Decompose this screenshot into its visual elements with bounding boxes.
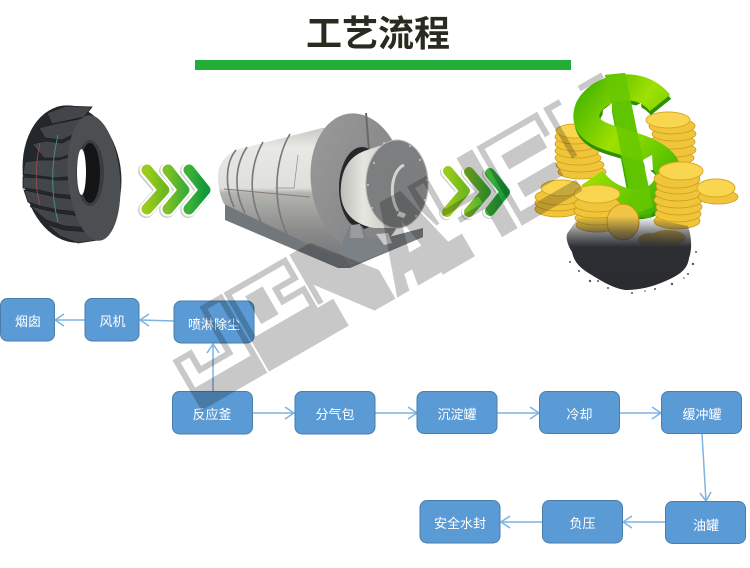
flow box: fan: 风机 (99, 314, 126, 329)
arrow: negative pressure to water seal (501, 516, 542, 528)
arrow: fan to chimney (55, 314, 85, 326)
arrow: separator to settling tank (375, 407, 417, 419)
flow box: oil tank (666, 502, 746, 544)
arrows: second chevrons (446, 171, 505, 213)
arrow: reactor to dust removal (207, 344, 219, 392)
watermark letter E (224, 247, 349, 372)
flow box: reactor: 反应釜 (192, 407, 232, 422)
arrow: reactor to separator (252, 407, 294, 419)
flow box: safety water seal (420, 500, 500, 543)
flow box: oil tank: 油罐 (693, 518, 719, 533)
flow box: reactor (172, 392, 252, 434)
title underline bar (195, 60, 571, 70)
front left coin stack (535, 180, 581, 217)
arrow: cooling to buffer tank (620, 407, 661, 419)
flow arrows (55, 314, 711, 528)
back right coin stack (646, 112, 696, 165)
watermark letter N right (542, 73, 631, 159)
leaning coins (607, 204, 686, 247)
arrows: first chevrons (146, 170, 205, 210)
arrow: settling tank to cooling (497, 407, 539, 419)
watermark letter E right (476, 112, 583, 226)
arrow: buffer tank to oil tank (700, 434, 711, 501)
flow box: chimney (0, 298, 54, 341)
watermark letter L (156, 294, 267, 411)
flow box: settling tank (417, 392, 497, 434)
flow box: negative pressure: 负压 (569, 516, 596, 531)
arrow: oil tank to negative pressure (623, 516, 665, 528)
flow box: chimney: 烟囱 (15, 314, 41, 329)
flow box: settling tank: 沉淀罐 (437, 407, 477, 422)
flow box: buffer tank (662, 392, 742, 434)
center coin stack (574, 185, 620, 232)
flow box: buffer tank: 缓冲罐 (682, 407, 722, 422)
flow box: gas separator (295, 392, 375, 434)
far right coin stack (697, 179, 738, 204)
flow box: spray dust removal (174, 301, 254, 343)
flow box: fan (85, 298, 139, 341)
flow box: safety water seal: 安全水封 (434, 516, 486, 531)
right coin stack (654, 162, 703, 229)
icon: tire (14, 99, 130, 249)
icon: coins and dollar sign (535, 73, 738, 294)
arrow: dust removal to fan (140, 314, 174, 326)
flow box: cooling: 冷却 (566, 407, 593, 422)
flow box: cooling (540, 392, 620, 434)
flow box: spray dust removal: 喷淋除尘 (188, 317, 240, 332)
flow box: negative pressure (542, 500, 622, 543)
watermark letter A (352, 175, 475, 300)
watermark letter H (407, 149, 518, 266)
icon: pyrolysis reactor (218, 107, 428, 268)
title: 工艺流程 (306, 13, 450, 54)
watermark logo (155, 73, 649, 413)
powder pile (567, 216, 697, 294)
back left coin stack (555, 124, 606, 179)
flow box: gas separator: 分气包 (315, 407, 355, 422)
watermark letter N (289, 220, 395, 334)
dollar sign (586, 73, 670, 218)
